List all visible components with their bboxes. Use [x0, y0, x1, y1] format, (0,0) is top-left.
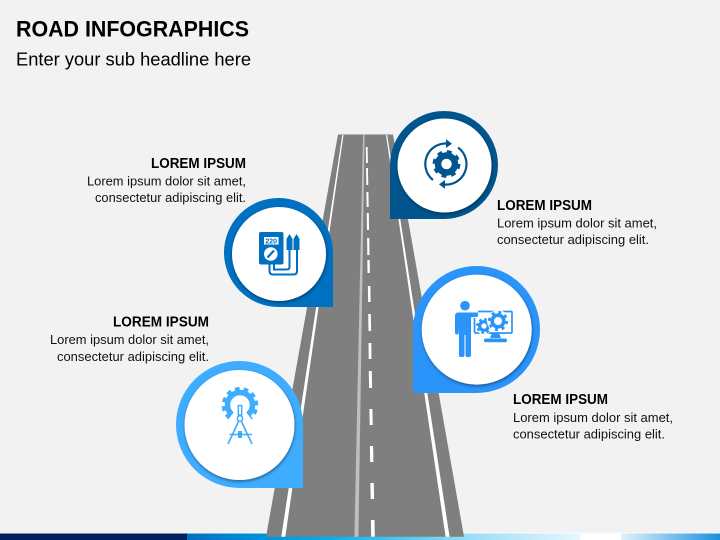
text block: top right: Lorem ipsum dolor sit amet,	[497, 216, 657, 230]
icon: compass inside gear	[223, 389, 256, 444]
text block: lower right: Lorem ipsum dolor sit amet,	[513, 410, 673, 425]
text block: lower left: consectetur adipiscing elit.	[57, 349, 209, 364]
text block: top right	[497, 198, 657, 247]
icon: multimeter: 220	[265, 238, 277, 245]
text block: top right: LOREM IPSUM	[497, 198, 592, 214]
pin shape bright blue	[413, 266, 540, 393]
icon: presenter and monitor	[455, 301, 512, 357]
text block: lower left	[50, 314, 209, 364]
pin 4: compass and gear	[176, 361, 303, 488]
pin 3: presenter with gears	[413, 266, 540, 393]
road edge line left	[281, 135, 344, 537]
white disc	[232, 207, 326, 301]
road edge line right	[386, 135, 450, 537]
text block: lower left: Lorem ipsum dolor sit amet,	[50, 332, 209, 347]
pin shape dark blue	[390, 111, 498, 219]
text block: top left: consectetur adipiscing elit.	[95, 190, 246, 205]
white disc	[398, 118, 492, 212]
road surface	[266, 134, 464, 537]
text block: lower right: LOREM IPSUM	[513, 392, 608, 408]
icon: gear with cycle arrows	[425, 139, 466, 189]
title: ROAD INFOGRAPHICS	[16, 16, 249, 42]
white disc	[184, 370, 294, 480]
pin shape blue	[224, 198, 333, 307]
text block: top left: Lorem ipsum dolor sit amet,	[87, 174, 246, 188]
text block: top right: consectetur adipiscing elit.	[497, 232, 649, 247]
road dashed lane	[367, 147, 373, 537]
text block: lower right	[513, 392, 673, 442]
subtitle: Enter your sub headline here	[16, 48, 251, 70]
text block: top left: LOREM IPSUM	[151, 156, 246, 172]
footer colour bar	[0, 532, 720, 540]
pin shape sky blue	[176, 361, 303, 488]
road centre grey line	[354, 135, 365, 537]
text block: lower left: LOREM IPSUM	[113, 314, 209, 330]
text block: lower right: consectetur adipiscing elit.	[513, 426, 665, 442]
pin 1: process gear	[390, 111, 498, 219]
road	[266, 134, 464, 537]
pin 2: multimeter	[224, 198, 333, 307]
white disc	[422, 275, 532, 385]
text block: top left	[87, 156, 246, 205]
